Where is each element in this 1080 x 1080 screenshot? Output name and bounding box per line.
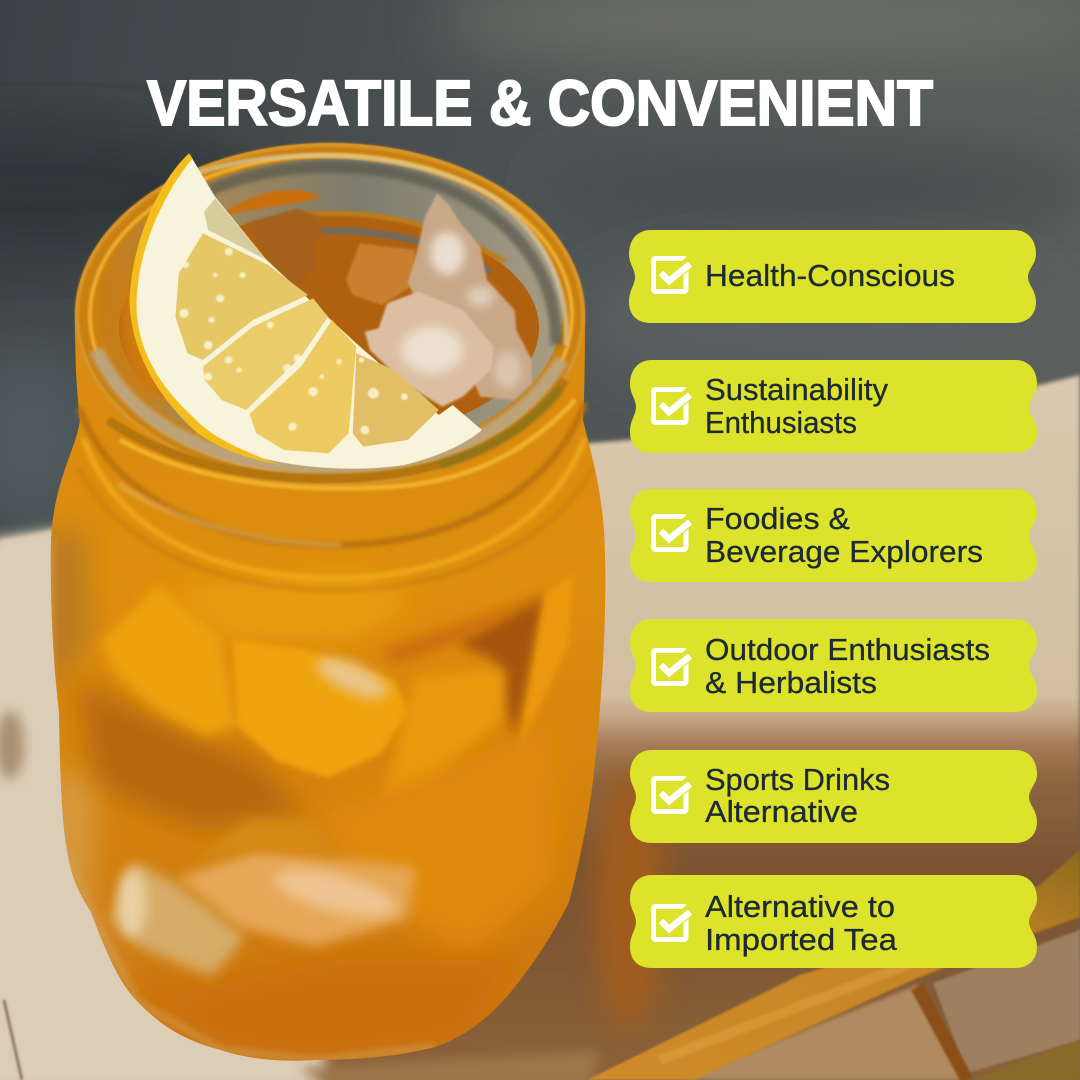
jar body [40,310,620,1080]
callout: Outdoor Enthusiasts & Herbalists: Outdoor Enthusiasts [705,632,990,667]
callout: Alternative to Imported Tea [630,875,1037,968]
callout: Alternative to Imported Tea: Alternative to [705,889,895,924]
callout: Sports Drinks Alternative: Alternative [705,794,858,829]
photo background: linen cloth [0,375,1080,1080]
callout: Sports Drinks Alternative: Sports Drinks [705,762,890,797]
icon: checkbox [654,390,692,422]
ice: pale tall chunk [408,193,532,400]
callout: Health-Conscious [629,230,1036,323]
ice: amber cube behind lemon [246,208,323,287]
callout: Sustainability Enthusiasts [630,360,1037,453]
callout: Alternative to Imported Tea: Imported Tea [705,922,898,957]
callout: Outdoor Enthusiasts & Herbalists [630,619,1037,712]
lemon flesh segments [175,198,439,453]
tea surface inside jar [119,190,539,441]
icon: checkbox [654,258,692,292]
callout: Sustainability Enthusiasts: Sustainability [705,372,888,407]
title: VERSATILE & CONVENIENT [147,67,933,139]
callout: Foodies & Beverage Explorers: Foodies & [705,501,850,536]
icon: checkbox [654,516,692,550]
lemon pulp highlights [179,248,408,434]
icon: checkbox [654,906,692,940]
icon: checkbox [654,778,692,812]
callout: Outdoor Enthusiasts & Herbalists: & Herbalists [705,665,877,700]
callout: Sustainability Enthusiasts: Enthusiasts [705,405,857,440]
ice: amber centre cube [346,243,415,305]
ice cubes and lemon wedge [130,153,532,469]
callout: Foodies & Beverage Explorers [630,489,1037,582]
callout: Health-Conscious: Health-Conscious [705,258,955,293]
lemon rind [130,153,482,469]
jar neck ridges [80,405,592,590]
cloth corner and wooden slats, bottom right [680,930,1080,1080]
ice: pale front chunk [365,292,494,407]
jar rim [75,143,585,488]
callout: Foodies & Beverage Explorers: Beverage Explorers [705,534,983,569]
cinnamon stick [587,850,1080,1080]
mason jar with iced tea [40,143,620,1080]
ice highlights [401,232,521,388]
callout: Sports Drinks Alternative [630,750,1037,843]
lemon peel edge [130,153,280,465]
icon: checkbox [654,650,692,684]
